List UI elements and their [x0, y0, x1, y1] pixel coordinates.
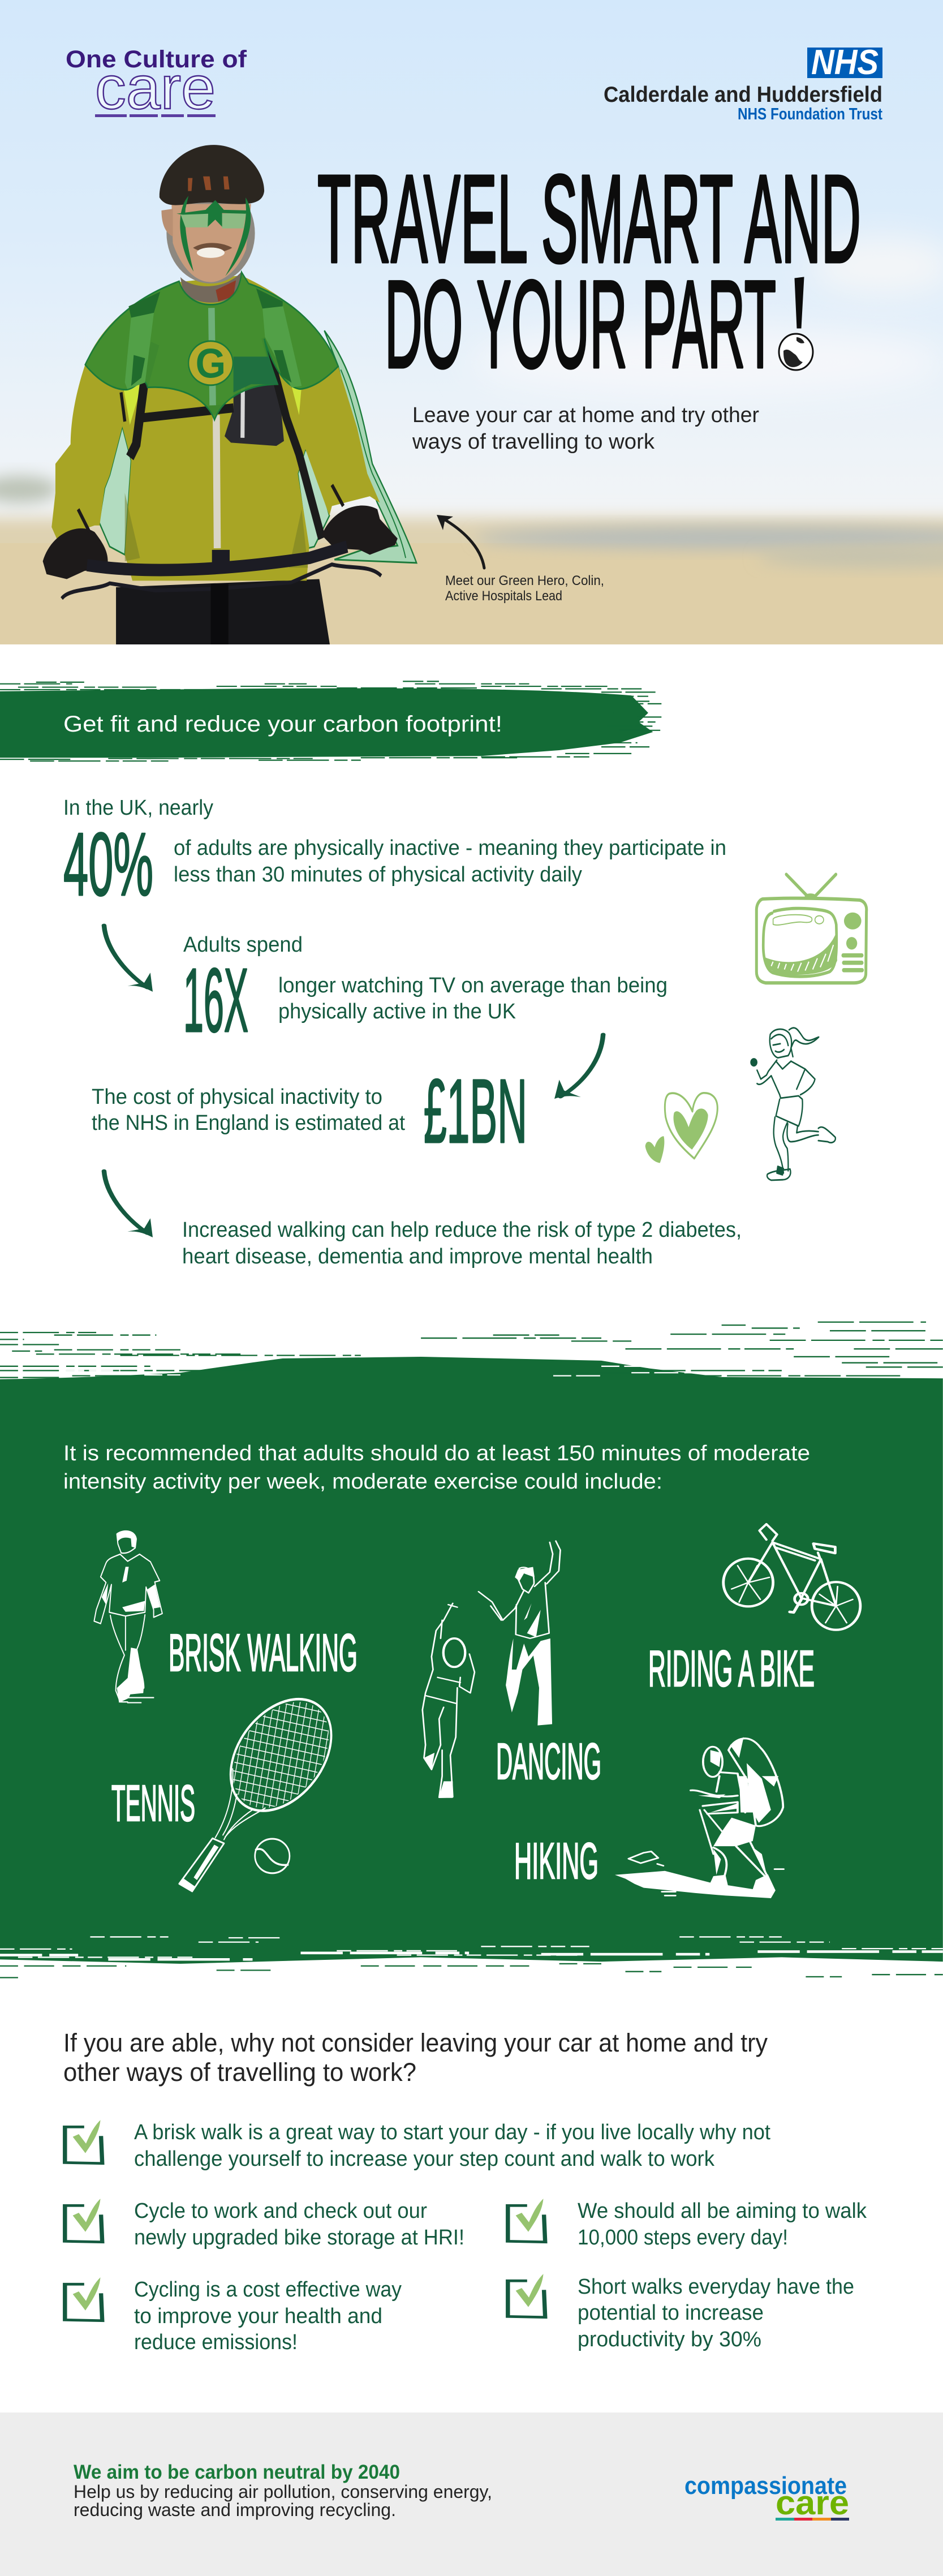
- tip: cost effective cycling: [65, 2277, 402, 2354]
- tip: cost effective cycling: to improve your health and: [134, 2304, 382, 2328]
- title: [317, 149, 861, 394]
- stat: 16X: Adults spend: [183, 933, 303, 957]
- tip: cost effective cycling: reduce emissions!: [134, 2330, 298, 2354]
- tip: cost effective cycling: Cycling is a cost effective way: [134, 2278, 402, 2302]
- tip: 10,000 steps: [508, 2199, 867, 2250]
- logo: One Culture of care: One Culture of: [66, 46, 247, 73]
- arrow: down to 16X: [104, 926, 153, 992]
- icon: hearts: [645, 1093, 717, 1163]
- tip: bike storage: Cycle to work and check out our: [134, 2199, 427, 2223]
- stat: cost to the NHS: the NHS in England is estimated at: [92, 1111, 405, 1135]
- stat: cost to the NHS: [92, 1060, 527, 1162]
- icon: globe: [779, 334, 813, 370]
- illustration: brisk walker: [94, 1531, 162, 1702]
- hero subtitle: Leave your car at home and try other: [412, 403, 759, 427]
- panel: green activity band: [0, 1322, 943, 1977]
- heading: consider leaving your car: other ways of travelling to work?: [63, 2058, 416, 2087]
- arrow: down to walking benefits: [104, 1171, 153, 1237]
- panel: green activity band: intensity activity per week, moderate exercise could include:: [63, 1470, 662, 1494]
- tip: productivity: productivity by 30%: [578, 2328, 761, 2351]
- black straps: [265, 337, 322, 539]
- green yoke: [85, 272, 338, 420]
- hero subtitle: ways of travelling to work: [412, 430, 655, 454]
- tip: brisk walk: A brisk walk is a great way to start your day - if you live locally why not: [134, 2121, 770, 2144]
- text: walking benefits: Increased walking can help reduce the risk of type 2 diabetes,: [182, 1218, 742, 1242]
- stat: 40% inactive: In the UK, nearly: [63, 796, 213, 820]
- footer message: [74, 2461, 492, 2520]
- stat: 16X: 16X: [183, 949, 248, 1051]
- logo: NHS Calderdale and Huddersfield: Calderdale and Huddersfield: [604, 83, 882, 107]
- logo: compassionate care: care: [776, 2484, 849, 2522]
- zipper: [216, 415, 217, 548]
- arrow: down to cost: [554, 1034, 603, 1099]
- tip: bike storage: [65, 2199, 464, 2250]
- green mask: [180, 196, 193, 272]
- pouch: [225, 385, 284, 446]
- illustration: bicycle: [724, 1524, 860, 1630]
- stat: 40% inactive: 40%: [63, 815, 153, 914]
- scarf: [180, 272, 241, 303]
- moustache and smile: [193, 243, 232, 251]
- heading: consider leaving your car: [63, 2028, 768, 2087]
- handlebar and stem: [87, 547, 347, 570]
- panel: footer: [0, 2412, 943, 2576]
- footer message: Help us by reducing air pollution, conserving energy,: [74, 2482, 492, 2502]
- stat: 16X: longer watching TV on average than being: [278, 974, 668, 997]
- footer message: We aim to be carbon neutral by 2040: [74, 2461, 400, 2483]
- helmet: [160, 145, 264, 205]
- caption: Meet our Green Hero: Active Hospitals Lead: [445, 588, 562, 604]
- logo: compassionate care: [684, 2472, 849, 2522]
- gloves: [43, 528, 108, 579]
- cape right: [324, 330, 416, 563]
- footer message: reducing waste and improving recycling.: [74, 2500, 396, 2520]
- activity labels: DANCING: [496, 1734, 601, 1790]
- arrow: pointing to Colin: [437, 515, 484, 568]
- stat: 40% inactive: of adults are physically inactive - meaning they participate in: [174, 836, 726, 860]
- logo: NHS Calderdale and Huddersfield: NHS: [811, 43, 879, 82]
- figure: Colin the Green Hero on a bike: G: [196, 340, 226, 386]
- tip: 10,000 steps: We should all be aiming to walk: [578, 2199, 867, 2223]
- logo: One Culture of care: care: [95, 53, 216, 122]
- panel: green activity band: It is recommended that adults should do at least 150 minutes of moderate: [63, 1442, 810, 1465]
- panel: brush banner: [0, 681, 665, 761]
- logo: One Culture of care: [66, 46, 247, 122]
- tip: bike storage: newly upgraded bike storage at HRI!: [134, 2226, 464, 2250]
- text: walking benefits: [182, 1218, 742, 1268]
- caption: Meet our Green Hero: Meet our Green Hero, Colin,: [445, 573, 604, 588]
- figure: Colin the Green Hero on a bike: [43, 145, 416, 645]
- illustration: hiker: [615, 1737, 783, 1898]
- stat: 40% inactive: [63, 796, 726, 914]
- logo: compassionate care: compassionate: [684, 2472, 847, 2500]
- panel: brush banner: Get fit and reduce your carbon footprint!: [63, 712, 502, 737]
- activity labels: BRISK WALKING: [169, 1623, 358, 1682]
- tip: productivity: potential to increase: [578, 2301, 764, 2325]
- stat: cost to the NHS: The cost of physical inactivity to: [92, 1085, 382, 1109]
- tip: brisk walk: [65, 2120, 770, 2171]
- heading: consider leaving your car: If you are able, why not consider leaving your car at home and try: [63, 2028, 768, 2057]
- activity labels: TENNIS: [111, 1775, 195, 1832]
- illustration: tennis racket and ball: [179, 1676, 350, 1891]
- backpack straps through yoke: [125, 313, 154, 389]
- activity labels: HIKING: [514, 1833, 598, 1890]
- tip: 10,000 steps: 10,000 steps every day!: [578, 2226, 788, 2250]
- icon: television: [756, 874, 867, 983]
- trousers: [116, 579, 330, 645]
- illustration: dancers: [423, 1541, 561, 1798]
- stat: 16X: physically active in the UK: [278, 1000, 516, 1023]
- tip: brisk walk: challenge yourself to increase your step count and walk to work: [134, 2147, 715, 2171]
- stat: 40% inactive: less than 30 minutes of physical activity daily: [174, 863, 582, 887]
- logo: NHS Calderdale and Huddersfield: NHS Foundation Trust: [738, 105, 882, 123]
- caption: Meet our Green Hero: [445, 573, 604, 604]
- activity labels: [111, 1623, 815, 1890]
- logo: NHS Calderdale and Huddersfield: [604, 43, 882, 123]
- cape left of body: [99, 427, 131, 554]
- hero subtitle: [412, 403, 759, 454]
- tip: productivity: [508, 2274, 854, 2351]
- tip: productivity: Short walks everyday have the: [578, 2275, 854, 2299]
- G badge: [188, 341, 233, 385]
- text: walking benefits: heart disease, dementia and improve mental health: [182, 1245, 653, 1268]
- icon: runner: [750, 1028, 836, 1180]
- infographic canvas: £1BN: [424, 1060, 527, 1162]
- panel: hero photo background: [0, 0, 943, 687]
- head and hair: [166, 203, 255, 284]
- jersey: [51, 276, 380, 580]
- stat: 16X: [183, 933, 668, 1051]
